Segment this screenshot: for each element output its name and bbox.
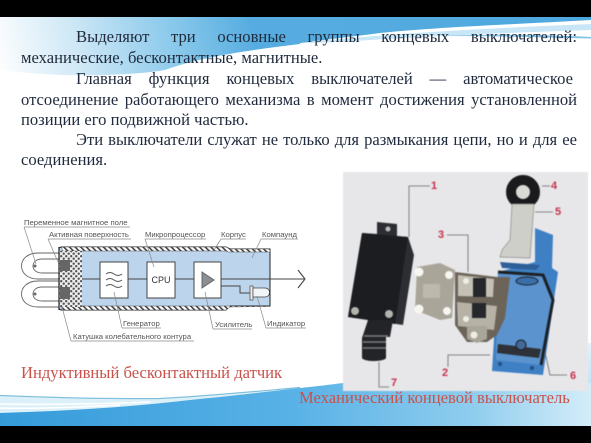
callout lines — [24, 227, 306, 341]
body text: позиции его подвижной частью. — [21, 110, 249, 129]
caption: inductive sensor: Индуктивный бесконтактный датчик — [21, 363, 282, 382]
sensor housing — [59, 247, 270, 310]
generator block — [100, 262, 128, 298]
callout labels: Корпус — [221, 230, 246, 239]
part numbers: 2 — [442, 367, 448, 379]
body text: Выделяют три основные группы концевых выключателей: — [76, 27, 577, 46]
amplifier block — [194, 262, 221, 298]
diagram: inductive proximity sensor — [21, 218, 306, 342]
signal line and output arrow — [82, 270, 305, 288]
part numbers: 4 — [551, 180, 558, 192]
CPU block — [147, 262, 175, 298]
callout labels: Индикатор — [267, 319, 305, 328]
black cover with gland — [348, 222, 414, 361]
callout labels: Генератор — [123, 319, 160, 328]
caption: mechanical limit switch: Механический концевой выключатель — [299, 388, 570, 407]
CPU block: CPU — [151, 275, 171, 285]
callout labels: Микропроцессор — [145, 230, 205, 239]
photo: mechanical limit switch, exploded view — [342, 172, 588, 392]
body text: Главная функция концевых выключателей — автоматическое — [76, 69, 573, 88]
body text — [21, 27, 577, 169]
body text: механические, бесконтактные, магнитные. — [21, 48, 322, 67]
contact block — [414, 263, 510, 343]
callout labels: Катушка колебательного контура — [73, 332, 192, 341]
LED indicator — [250, 286, 270, 300]
callout labels — [24, 218, 305, 341]
body text: соединения. — [21, 150, 107, 169]
magnetic field loops — [22, 253, 59, 307]
callout labels: Переменное магнитное поле — [24, 218, 127, 227]
body text: отсоединение работающего механизма в момент достижения установленной — [21, 90, 577, 109]
callout labels: Усилитель — [215, 320, 252, 329]
part numbers: 5 — [555, 206, 561, 218]
part numbers: 3 — [438, 229, 444, 241]
part numbers: 7 — [391, 377, 397, 389]
part numbers: 1 — [431, 180, 437, 192]
callout labels: Компаунд — [262, 230, 297, 239]
leader lines — [379, 186, 567, 387]
callout labels: Активная поверхность — [49, 230, 129, 239]
roller lever — [500, 180, 540, 270]
body text: Эти выключатели служат не только для размыкания цепи, но и для ее — [76, 130, 577, 149]
part numbers: 6 — [570, 370, 576, 382]
blue switch body — [492, 228, 558, 375]
part numbers — [391, 180, 576, 389]
